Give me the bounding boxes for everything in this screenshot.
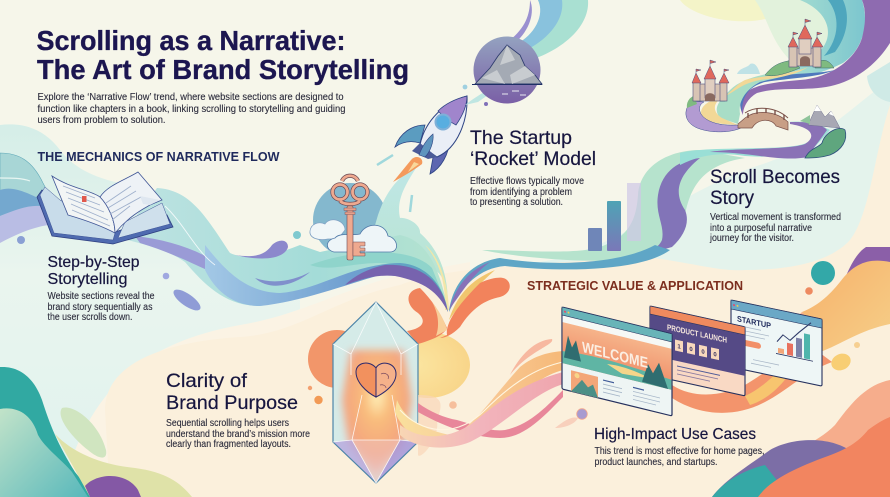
- icon: startup browser window: [731, 300, 822, 386]
- icon: product launch browser window: 1: [677, 344, 681, 351]
- panel: top right river: [680, 0, 890, 165]
- intro text: function like chapters in a book, linking scrolling to storytelling and guiding: [38, 104, 346, 115]
- intro text: [38, 92, 346, 126]
- text block: startup rocket model: from identifying a problem: [470, 187, 572, 198]
- text block: scroll becomes story: into a purposeful narrative: [710, 223, 812, 234]
- text block: scroll becomes story: Scroll Becomes: [710, 166, 840, 188]
- text block: step-by-step storytelling: [48, 254, 155, 323]
- heading: mechanics of narrative flow: THE MECHANICS OF NARRATIVE FLOW: [38, 150, 280, 164]
- text block: high-impact use cases: This trend is most effective for home pages,: [594, 446, 764, 457]
- text block: scroll becomes story: Story: [710, 187, 754, 209]
- text block: startup rocket model: The Startup: [470, 127, 572, 149]
- panel: bottom right blobs: [712, 247, 890, 497]
- text block: clarity of brand purpose: clearly than fragmented layouts.: [166, 439, 291, 450]
- text block: high-impact use cases: High-Impact Use Cases: [594, 426, 756, 443]
- text block: scroll becomes story: Vertical movement is transformed: [710, 212, 841, 223]
- icon: welcome browser window: [562, 307, 672, 416]
- text block: scroll becomes story: journey for the visitor.: [709, 233, 794, 244]
- icon: product launch browser window: [650, 306, 745, 396]
- icon: product launch browser window: 0: [701, 349, 705, 356]
- panel: rocket trail into flow: [371, 165, 448, 305]
- text block: step-by-step storytelling: Storytelling: [48, 271, 128, 288]
- text block: startup rocket model: to presenting a solution.: [470, 197, 563, 208]
- text block: step-by-step storytelling: brand story sequentially as: [48, 302, 152, 313]
- panel: orange splash: [386, 278, 510, 398]
- icon: product launch browser window: 0: [689, 347, 693, 353]
- panel: far left ribbons behind the book: [0, 153, 60, 244]
- text block: startup rocket model: [470, 127, 596, 208]
- icon: welcome browser window: WELCOME: [582, 339, 648, 372]
- icon: key with clouds: [310, 176, 397, 260]
- panel: key backdrop circle: [313, 183, 387, 257]
- heading: strategic value and application: STRATEGIC VALUE & APPLICATION: [527, 279, 743, 293]
- icon: mountain: [463, 36, 542, 106]
- text block: high-impact use cases: product launches, and startups.: [594, 457, 718, 468]
- text block: startup rocket model: ‘Rocket’ Model: [470, 148, 596, 170]
- icon: startup browser window: STARTUP: [737, 314, 772, 330]
- icon: mountains and bush: [800, 105, 846, 158]
- text block: clarity of brand purpose: Brand Purpose: [166, 392, 298, 414]
- intro text: Explore the ‘Narrative Flow’ trend, where website sections are designed to: [38, 92, 344, 103]
- chart: rising bars: [588, 183, 641, 251]
- intro text: users from problem to solution.: [38, 115, 166, 126]
- text block: step-by-step storytelling: the user scrolls down.: [48, 312, 132, 323]
- text block: step-by-step storytelling: Step-by-Step: [48, 254, 140, 271]
- icon: small castle: [687, 60, 760, 108]
- text block: startup rocket model: Effective flows typically move: [470, 176, 584, 187]
- text block: clarity of brand purpose: [166, 370, 310, 450]
- panel: main left flow: [120, 155, 449, 314]
- icon: open book: [37, 172, 173, 244]
- icon: crystal with heart and brain: [308, 302, 418, 483]
- panel: bottom left blobs: [0, 367, 192, 497]
- icon: product launch browser window: 0: [713, 352, 717, 359]
- title: [36, 25, 409, 85]
- text block: clarity of brand purpose: Clarity of: [166, 370, 248, 392]
- panel: right flow to bars and river: [449, 150, 745, 320]
- panel: ribbons from crystal to windows: [395, 339, 832, 456]
- title: The Art of Brand Storytelling: [37, 54, 409, 85]
- text block: clarity of brand purpose: Sequential scrolling helps users: [166, 418, 289, 429]
- title: Scrolling as a Narrative:: [36, 25, 346, 56]
- icon: stone bridge: [738, 108, 788, 130]
- text block: step-by-step storytelling: Website sections reveal the: [48, 291, 155, 302]
- panel: ribbon from top to mountain: [465, 0, 588, 105]
- text block: scroll becomes story: [709, 166, 841, 244]
- text block: clarity of brand purpose: understand the brand’s mission more: [166, 429, 310, 440]
- icon: product launch browser window: PRODUCT LAUNCH: [667, 323, 727, 345]
- text block: high-impact use cases: [594, 426, 764, 468]
- icon: rocket: [393, 96, 467, 182]
- icon: large castle: [765, 19, 834, 76]
